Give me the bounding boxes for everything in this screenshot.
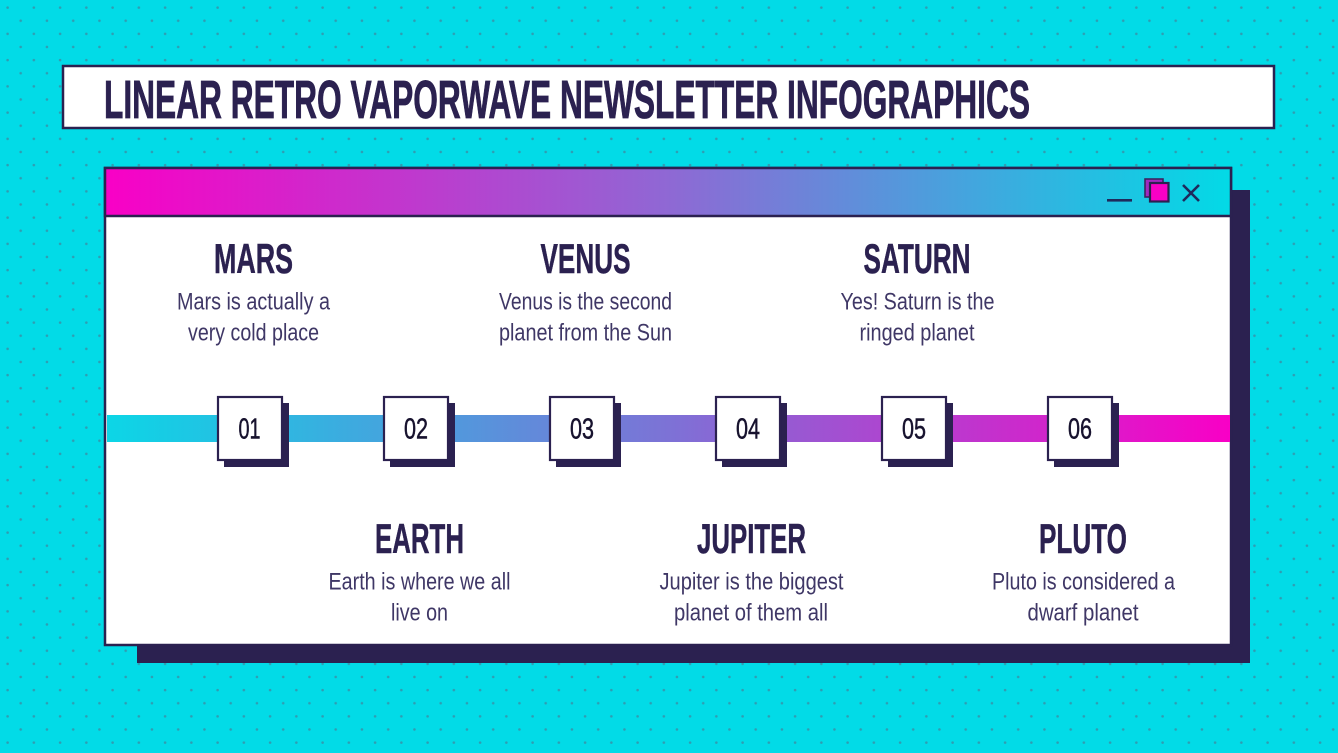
step 01 [218,397,289,467]
text block: Earth: Earth is where we all [328,568,510,596]
step 05: 05 [902,414,926,446]
text block: Mars: MARS [214,235,293,282]
text block: Jupiter: JUPITER [697,515,806,562]
icon: minimize [1107,199,1132,202]
text block: Saturn [840,235,994,346]
panel: window [105,168,1250,663]
step 03 [550,397,621,467]
text block: Saturn: SATURN [864,235,970,282]
text block: Venus: planet from the Sun [499,320,672,346]
icon: restore [1145,179,1168,202]
step 06: 06 [1068,414,1092,446]
text block: Venus: VENUS [540,235,630,282]
icon: close [1183,185,1199,201]
text block: Jupiter: planet of them all [674,600,828,626]
text block: Mars: very cold place [188,320,319,346]
step 02 [384,397,455,467]
step 04: 04 [736,414,760,446]
step 03: 03 [570,414,594,446]
step 05 [882,397,953,467]
text block: Pluto [992,515,1176,626]
text block: Pluto: dwarf planet [1028,600,1139,626]
window shadow [137,190,1250,663]
text block: Mars: Mars is actually a [177,288,331,316]
text block: Mars [177,235,331,346]
window body [105,168,1231,645]
step 04 [716,397,787,467]
window title bar [105,168,1231,216]
title banner [63,66,1274,130]
text block: Saturn: ringed planet [860,320,975,346]
text block: Pluto: PLUTO [1039,515,1127,562]
text block: Jupiter [660,515,844,626]
step 01: 01 [238,414,260,446]
step 02: 02 [404,414,428,446]
text block: Venus [499,235,672,346]
text block: Earth [328,515,510,626]
text block: Earth: live on [391,600,448,626]
text block: Pluto: Pluto is considered a [992,568,1176,596]
text block: Venus: Venus is the second [499,288,672,316]
step 06 [1048,397,1119,467]
text block: Earth: EARTH [375,515,464,562]
text block: Saturn: Yes! Saturn is the [840,288,994,316]
text block: Jupiter: Jupiter is the biggest [660,568,844,596]
timeline line [107,415,1230,442]
